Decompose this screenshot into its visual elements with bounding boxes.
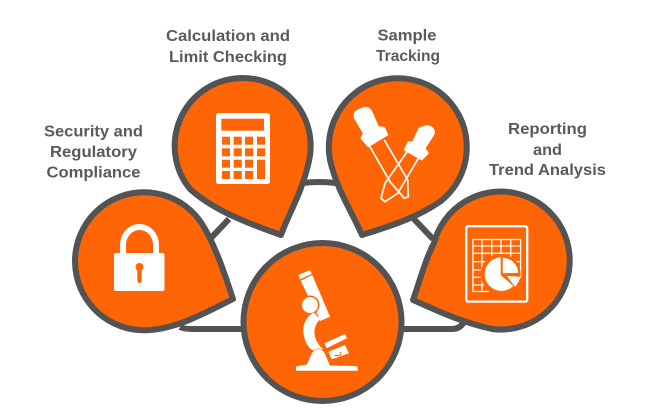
label: reporting and trend analysis: Reporting (508, 121, 587, 138)
icon: padlock (114, 227, 164, 291)
label: reporting and trend analysis: Trend Analysis (489, 162, 606, 179)
label: reporting and trend analysis (489, 121, 606, 179)
pin: sample tracking (329, 78, 467, 235)
label: security and regulatory compliance: Security and (44, 124, 143, 140)
label: calculation and limit checking: Calculation and (166, 28, 290, 45)
icon: crossed droppers (354, 107, 434, 202)
label: security and regulatory compliance (44, 124, 143, 182)
label: sample tracking: Sample (378, 28, 437, 44)
label: calculation and limit checking (166, 28, 290, 66)
label: sample tracking: Tracking (376, 48, 440, 65)
pin: security and regulatory compliance (75, 192, 233, 330)
icon: microscope (296, 270, 358, 371)
connector lines (180, 182, 464, 329)
icon: spreadsheet with pie chart (466, 226, 527, 302)
pin: calculation and limit checking (175, 78, 311, 235)
icon: calculator (216, 113, 270, 184)
label: security and regulatory compliance: Regulatory (50, 144, 137, 161)
centre circle: laboratory (244, 243, 402, 401)
label: sample tracking (376, 28, 440, 65)
pin: reporting and trend analysis (413, 192, 570, 330)
label: reporting and trend analysis: and (533, 142, 562, 159)
label: security and regulatory compliance: Compliance (46, 164, 141, 182)
label: calculation and limit checking: Limit Checking (169, 49, 287, 66)
